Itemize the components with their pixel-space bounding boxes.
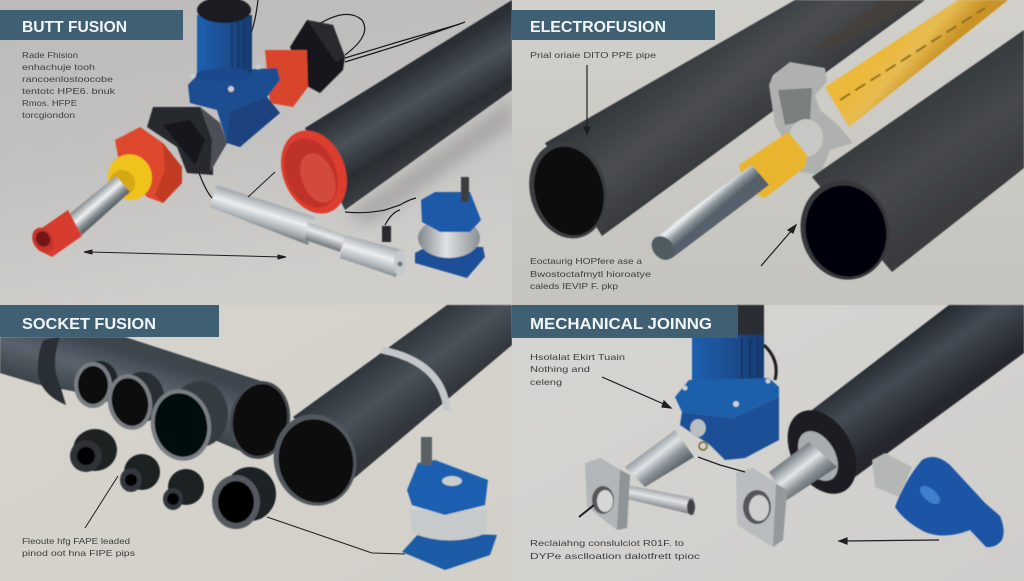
text block: socket fusion description: Fleoute hfg FAPE leaded [22,536,130,546]
text block: mechanical description [530,538,701,561]
cables [198,0,465,225]
heading: socket fusion: SOCKET FUSION [22,316,156,333]
panel: butt fusion [0,0,512,305]
three socket outlets [74,361,228,466]
text block: butt fusion description: Rmos. HFPE [22,98,77,108]
heading: butt fusion [0,10,183,40]
yellow pipe [825,0,1008,127]
right black pipe [790,30,1024,290]
chrome rod with yellow collar [647,132,807,264]
panel: electrofusion [512,0,1024,305]
arrow [84,250,286,259]
panel: socket fusion [0,305,512,581]
large black pipe with white band [263,305,512,515]
text block: mechanical top note: Hsolalat Ekirt Tuain [530,352,625,362]
panel: mechanical joining [512,305,1024,581]
text block: electrofusion description: Bwostoctafmytl hioroatye [530,269,651,279]
connecting wire [698,457,745,472]
heading: butt fusion: BUTT FUSION [22,19,127,36]
text block: mechanical top note: Nothing and [530,364,590,374]
text block: mechanical top note: celeng [530,377,562,387]
text block: mechanical description: DYPe asclloation dalotfrett tpioc [530,551,701,561]
heading: socket fusion [0,305,219,337]
pointer lines [85,476,405,554]
small fittings [70,429,276,529]
device: small blue pump [415,177,485,278]
left black pipe [519,0,925,247]
text block: electrofusion description: caleds IEVIP F. pkp [530,281,618,291]
text block: butt fusion description: enhachuje tooh [22,62,95,72]
text block: mechanical top note [530,352,625,387]
pointer line [248,172,275,197]
text block: butt fusion description [22,50,116,120]
machine: motor and clamp assembly [115,0,345,203]
heading: mechanical joining [512,305,738,338]
text block: electrofusion top note: Prial oriaie DITO PPE pipe [530,50,656,60]
right flange fitting [736,442,837,547]
pipe with red mouth [269,0,512,225]
device: blue pump [402,437,497,570]
black pipe with collar [774,305,1024,506]
arrows [579,377,939,544]
text block: butt fusion description: rancoenlostoocobe [22,74,113,84]
silver clamp [769,62,853,175]
heading: electrofusion [512,10,715,40]
left flange fitting [585,419,707,530]
text block: socket fusion description: pinod oot hna FIPE pips [22,548,135,558]
heading: electrofusion: ELECTROFUSION [530,19,666,36]
text block: butt fusion description: Rade Fhision [22,50,78,60]
text block: socket fusion description [22,536,135,558]
chrome rod with yellow collar and red cap [28,148,159,257]
text block: electrofusion description: Eoctaurig HOPfere ase a [530,256,642,266]
text block: mechanical description: Reclaiahng conslulciot R01F. to [530,538,684,548]
blue motor [675,305,779,460]
text block: butt fusion description: torcgiondon [22,110,75,120]
silver tube assembly [210,185,406,277]
text block: butt fusion description: tentotc HPE6. bnuk [22,86,116,96]
blue nozzle on bracket [872,453,1004,547]
arrows [584,65,796,266]
text block: electrofusion description [530,256,651,291]
long socket pipe [0,337,295,463]
heading: mechanical joining: MECHANICAL JOINNG [530,316,712,333]
